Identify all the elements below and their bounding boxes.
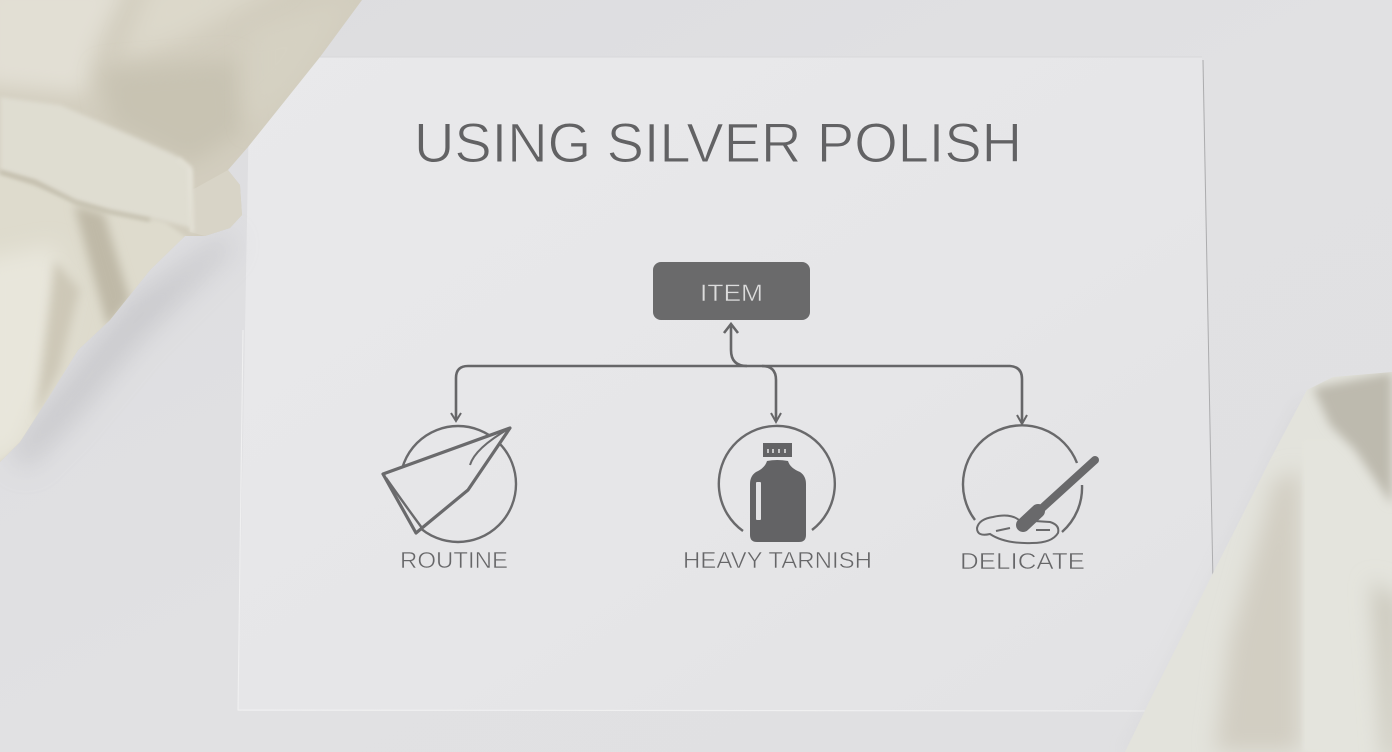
icon: polish bottle bbox=[719, 426, 835, 542]
item box bbox=[653, 262, 810, 320]
cloth: top left bbox=[0, 0, 370, 470]
title: USING SILVER POLISH bbox=[414, 111, 1022, 174]
icon: polishing cloth bbox=[383, 426, 516, 542]
branching arrows bbox=[451, 324, 1027, 424]
label: delicate: DELICATE bbox=[960, 548, 1085, 574]
paper sheet bbox=[238, 57, 1213, 711]
label: routine: ROUTINE bbox=[400, 547, 508, 573]
label: heavy tarnish: HEAVY TARNISH bbox=[683, 547, 872, 573]
cloth: bottom right bbox=[1139, 372, 1392, 752]
shadow of right cloth bbox=[1120, 400, 1320, 752]
icon: swab and polish bbox=[963, 425, 1095, 543]
shadow of left cloth bbox=[10, 235, 235, 470]
item box: ITEM bbox=[700, 280, 763, 307]
